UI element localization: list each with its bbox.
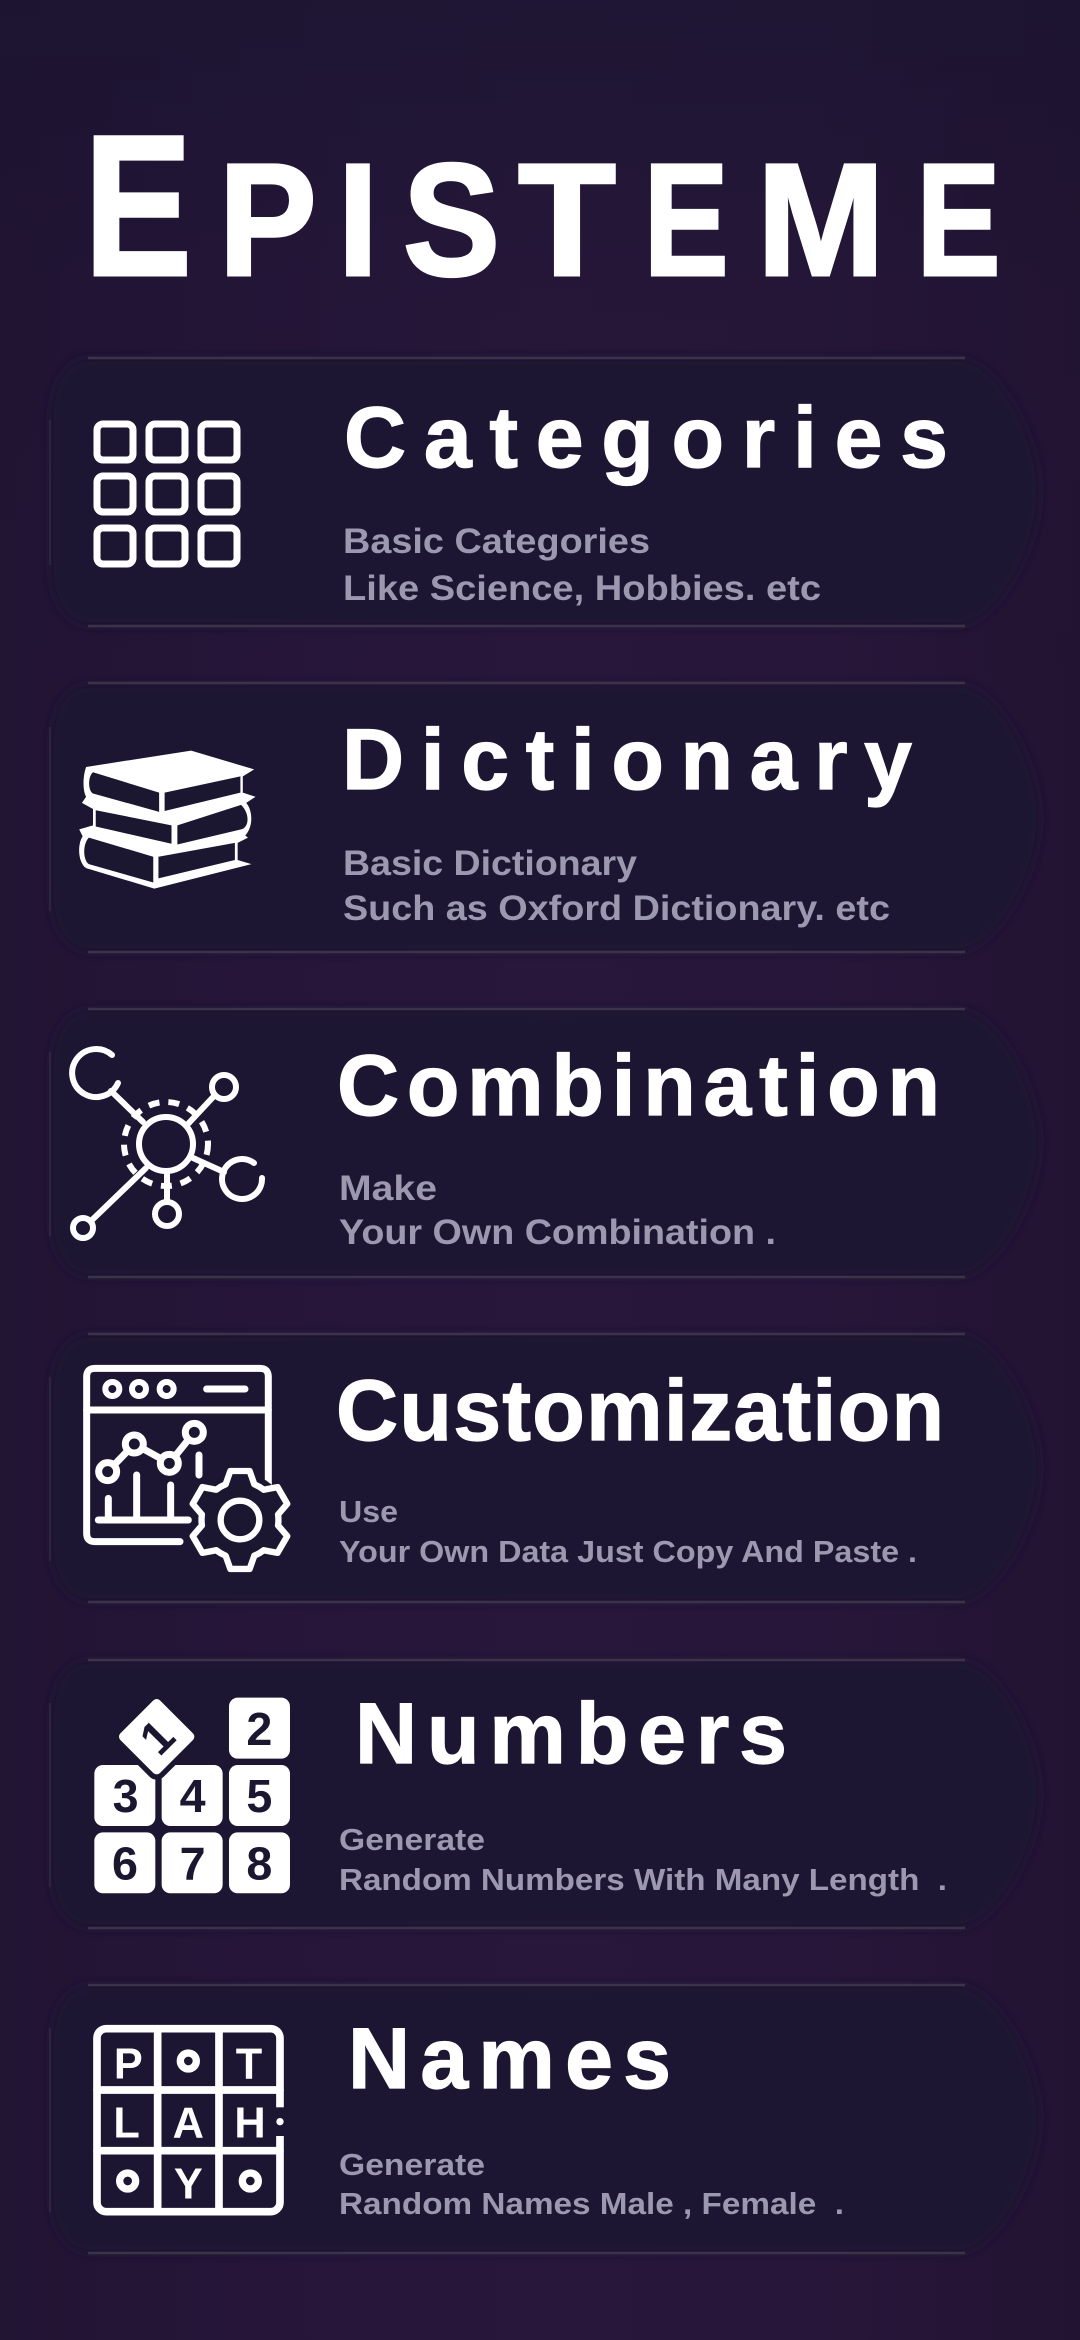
icon: dashboard with gear [87, 1368, 294, 1569]
icon: number blocks [94, 1693, 290, 1893]
title: Episteme: E [644, 130, 729, 309]
text: numbers description: Random Numbers With Many Length . [339, 1862, 947, 1897]
title: Episteme: E [916, 130, 1000, 309]
icon: number blocks: 4 [180, 1770, 206, 1822]
text: customization description [339, 1494, 917, 1569]
title: Episteme [84, 93, 1000, 318]
icon: letter grid: H [234, 2100, 266, 2148]
text: names description: Random Names Male , Female . [339, 2186, 844, 2221]
icon: letter grid: A [173, 2100, 204, 2148]
icon: number blocks: 3 [113, 1770, 139, 1822]
heading: customization: Customization [336, 1363, 944, 1459]
icon: letter grid: T [236, 2040, 262, 2088]
text: numbers description: Generate [339, 1822, 485, 1857]
icon: letter grid: P [114, 2040, 143, 2088]
title: Episteme: T [518, 130, 616, 309]
panel: categories [50, 358, 1040, 626]
panel: combination [50, 1009, 1040, 1277]
title: Episteme: I [338, 130, 378, 309]
panel: names [50, 1985, 1040, 2253]
title: Episteme: M [757, 130, 885, 309]
text: combination description: Your Own Combination . [339, 1213, 776, 1252]
title: Episteme: E [84, 93, 192, 318]
text: dictionary description [343, 844, 890, 928]
panel: customization [50, 1334, 1040, 1602]
icon: number blocks: 6 [112, 1837, 138, 1889]
icon: network nodes [72, 1049, 262, 1238]
text: dictionary description: Such as Oxford Dictionary. etc [343, 889, 890, 928]
heading: names: Names [348, 2011, 671, 2107]
icon: stack of books [79, 751, 256, 889]
title: Episteme: S [403, 130, 500, 309]
icon: letter grid: L [113, 2100, 140, 2148]
icon: number blocks: 7 [180, 1837, 206, 1889]
text: names description [339, 2147, 844, 2221]
text: combination description [339, 1169, 776, 1252]
text: names description: Generate [339, 2147, 485, 2182]
text: customization description: Your Own Data Just Copy And Paste . [339, 1534, 917, 1569]
text: categories description [343, 522, 821, 608]
text: combination description: Make [339, 1169, 437, 1208]
panel: dictionary [50, 683, 1040, 952]
panel: numbers [50, 1660, 1040, 1928]
heading: combination: Combination [337, 1038, 940, 1134]
icon: number blocks: 5 [246, 1770, 272, 1822]
text: categories description: Basic Categories [343, 522, 650, 561]
icon: category grid [97, 424, 237, 564]
icon: letter grid: Y [174, 2160, 203, 2208]
title: Episteme: P [219, 130, 317, 309]
text: customization description: Use [339, 1494, 398, 1529]
icon: number blocks: 2 [246, 1703, 272, 1755]
icon: number blocks: 1 [130, 1710, 185, 1765]
text: numbers description [339, 1822, 947, 1897]
heading: categories: Categories [344, 390, 948, 486]
icon: number blocks: 8 [246, 1837, 272, 1889]
icon: letter grid [97, 2029, 285, 2212]
heading: dictionary: Dictionary [342, 712, 912, 808]
heading: numbers: Numbers [355, 1686, 787, 1782]
text: dictionary description: Basic Dictionary [343, 844, 638, 883]
text: categories description: Like Science, Hobbies. etc [343, 569, 821, 608]
